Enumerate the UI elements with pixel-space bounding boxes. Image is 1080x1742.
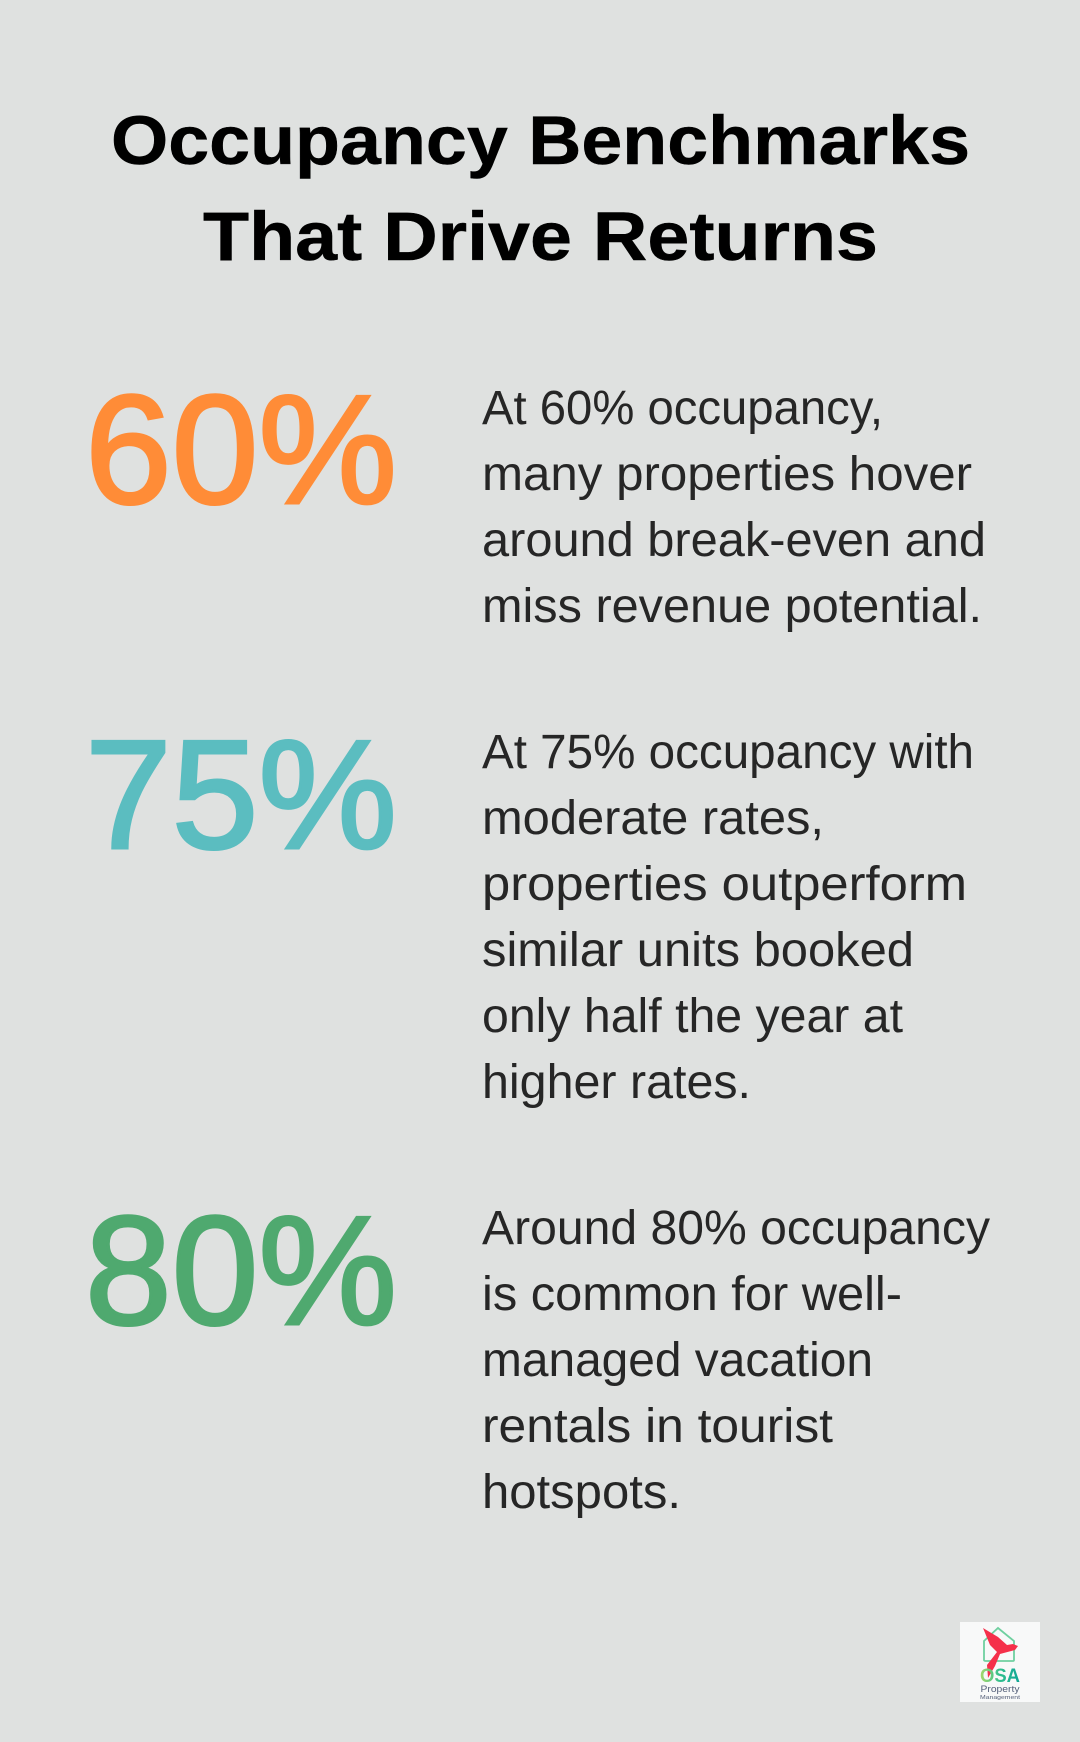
text block: 80% description: Around 80% occupancy xyxy=(482,1202,990,1255)
stat: 60%: 60% xyxy=(85,363,397,536)
text block: 60% description: many properties hover xyxy=(482,448,972,501)
text block: 75% description xyxy=(482,726,974,1109)
text block: 60% description xyxy=(482,382,986,633)
panel: 60% benchmark xyxy=(85,363,986,633)
stat: 80%: 80% xyxy=(85,1184,397,1357)
title: Occupancy Benchmarks xyxy=(111,102,970,179)
text block: 75% description: higher rates. xyxy=(482,1056,751,1109)
stat: 75%: 75% xyxy=(85,708,397,881)
text block: 75% description: only half the year at xyxy=(482,990,903,1043)
title xyxy=(111,102,970,275)
text block: 75% description: similar units booked xyxy=(482,924,914,977)
text block: 60% description: around break-even and xyxy=(482,514,986,567)
panel: 75% benchmark xyxy=(85,708,974,1109)
title: That Drive Returns xyxy=(203,198,878,275)
text block: 75% description: moderate rates, xyxy=(482,792,824,845)
icon: OSA Property Management logo xyxy=(960,1622,1040,1702)
text block: 80% description: is common for well- xyxy=(482,1268,902,1321)
text block: 80% description xyxy=(482,1202,990,1519)
text block: 80% description: hotspots. xyxy=(482,1466,681,1519)
icon: OSA Property Management logo: Management xyxy=(980,1695,1021,1701)
text block: 80% description: rentals in tourist xyxy=(482,1400,833,1453)
panel: 80% benchmark xyxy=(85,1184,990,1519)
text block: 75% description: At 75% occupancy with xyxy=(482,726,974,779)
text block: 75% description: properties outperform xyxy=(482,858,967,911)
text block: 60% description: miss revenue potential. xyxy=(482,580,982,633)
icon: OSA Property Management logo: OSA xyxy=(980,1666,1020,1687)
text block: 80% description: managed vacation xyxy=(482,1334,873,1387)
icon: OSA Property Management logo: Property xyxy=(980,1684,1020,1695)
text block: 60% description: At 60% occupancy, xyxy=(482,382,883,435)
